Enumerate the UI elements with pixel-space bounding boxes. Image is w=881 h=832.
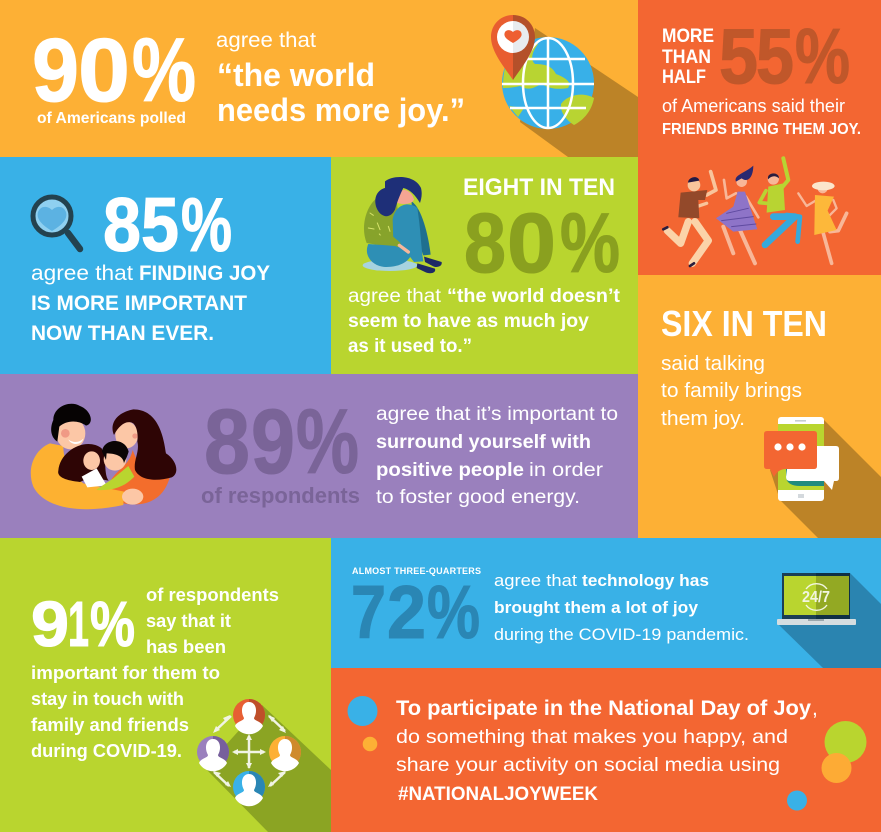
stat: 90%: %: [132, 21, 196, 121]
stat: 85%: %: [181, 183, 232, 268]
icon: sad woman sitting: [363, 177, 442, 273]
stat: 80%: 8: [464, 196, 506, 290]
arrows: connections: [213, 715, 286, 787]
panel: 72% technology: [331, 538, 881, 668]
text: surround yourself with positive people: positive people: [376, 460, 524, 481]
person: right: [269, 736, 301, 771]
panel: 55% friends bring joy: [638, 0, 881, 275]
text: how to participate: share your activity on social media using: [396, 754, 780, 776]
stat: 90%: [32, 21, 196, 121]
text: of Americans said their friends bring them joy: of Americans said their: [662, 96, 845, 116]
panel: call to action: [331, 668, 881, 832]
label: more than half: [662, 25, 714, 88]
text: important to stay in touch during COVID-19: [31, 585, 279, 761]
dancer one: [663, 172, 716, 266]
text: important to stay in touch during COVID-19: say that it: [146, 611, 231, 631]
icon: hugging family: [31, 404, 176, 509]
text: said talking to family brings them joy: to family brings: [661, 380, 802, 402]
dancer two: [716, 166, 758, 263]
text: agree that finding joy is more important now than ever: FINDING JOY: [139, 262, 270, 285]
text: how to participate: To participate in the National Day of Joy: [396, 697, 811, 720]
stat: 85%: 5: [141, 183, 179, 268]
stat: 90%: 0: [78, 21, 130, 121]
text: the world doesn't seem to have as much joy: as it used to.”: [348, 336, 472, 357]
text: surround yourself with positive people: surround yourself with: [376, 432, 591, 453]
text: technology has brought joy: technology has: [582, 571, 709, 590]
stat: 85%: [103, 183, 232, 268]
text: said talking to family brings them joy: said talking: [661, 353, 765, 375]
stat: 55%: [719, 12, 850, 100]
text: technology has brought joy: [494, 571, 749, 644]
person: left: [197, 736, 229, 771]
panel: 85% finding joy: [0, 157, 331, 374]
text: surround yourself with positive people: to foster good energy.: [376, 487, 580, 508]
panel: six in ten: [638, 275, 881, 538]
decorative dots: [348, 696, 866, 810]
text: important to stay in touch during COVID-19: has been: [146, 637, 226, 657]
icon: dancing friends: [663, 158, 847, 266]
text: agree that the world needs more joy: “the world: [217, 57, 375, 93]
label: eight in ten: EIGHT IN TEN: [463, 174, 615, 201]
label: more than half: HALF: [662, 66, 706, 88]
label: almost three-quarters: ALMOST THREE-QUARTERS: [352, 566, 481, 576]
text: how to participate: ,: [812, 697, 818, 720]
text: important to stay in touch during COVID-19: of respondents: [146, 585, 279, 605]
icon: laptop 24/7: [777, 573, 881, 668]
stat: 90%: 9: [32, 21, 79, 121]
text: the world doesn't seem to have as much joy: agree that: [348, 286, 442, 307]
text: the world doesn't seem to have as much joy: “the world doesn’t: [447, 286, 621, 307]
text: how to participate: [396, 697, 818, 776]
icon: phone with chat bubbles: [764, 417, 881, 538]
text: important to stay in touch during COVID-19: stay in touch with: [31, 689, 184, 709]
text: technology has brought joy: agree that: [494, 571, 577, 590]
dancer four: [798, 182, 847, 263]
text: surround yourself with positive people: agree that it’s important to: [376, 404, 618, 425]
text: important to stay in touch during COVID-19: important for them to: [31, 663, 220, 683]
stat: 72%: 7: [351, 570, 386, 654]
stat: 80%: 0: [507, 196, 556, 290]
text: technology has brought joy: during the COVID-19 pandemic.: [494, 625, 749, 644]
text: of Americans said their friends bring them joy: FRIENDS BRING THEM JOY.: [662, 121, 861, 138]
stat: 80%: [464, 196, 620, 290]
label: more than half: MORE: [662, 25, 714, 47]
label: more than half: THAN: [662, 46, 711, 68]
icon: globe with heart pin: [491, 15, 638, 157]
stat: 89%: [204, 391, 359, 493]
stat: 91%: 1: [68, 588, 89, 660]
text: said talking to family brings them joy: [661, 353, 802, 430]
stat: 85%: 8: [103, 183, 141, 268]
text: the world doesn't seem to have as much joy: [348, 286, 621, 357]
stat: 72%: [351, 570, 480, 654]
panel: 89% positive people: [0, 374, 638, 538]
text: agree that the world needs more joy: needs more joy.”: [217, 92, 465, 128]
text: of Americans said their friends bring them joy: [662, 96, 861, 138]
text: agree that the world needs more joy: agree that: [216, 29, 316, 52]
caption: of Americans polled: of Americans polled: [37, 110, 186, 127]
text: agree that finding joy is more important now than ever: [31, 262, 270, 345]
icon: connected people network: [197, 699, 331, 832]
stat: 55%: %: [795, 12, 850, 100]
text: technology has brought joy: brought them a lot of joy: [494, 598, 699, 617]
person: top: [233, 699, 265, 734]
stat: 91%: [31, 588, 135, 660]
stat: 91%: 9: [31, 588, 69, 660]
heading: six in ten: SIX IN TEN: [661, 303, 827, 344]
stat: 72%: %: [427, 570, 480, 654]
text: surround yourself with positive people: [376, 404, 618, 508]
icon: laptop 24/7: 24/7: [802, 589, 830, 606]
stat: 91%: %: [90, 588, 135, 660]
person: bottom: [233, 771, 265, 806]
stat: 80%: %: [560, 196, 620, 290]
text: surround yourself with positive people: in order: [529, 460, 604, 481]
stat: 72%: 2: [387, 570, 426, 654]
panel: 90% the world needs more joy: [0, 0, 638, 157]
panel: 80% eight in ten: [331, 157, 638, 374]
icon: magnifying glass with heart: [33, 197, 80, 249]
stat: 89%: 8: [204, 391, 250, 493]
text: agree that finding joy is more important now than ever: IS MORE IMPORTANT: [31, 292, 247, 315]
stat: 89%: %: [296, 391, 359, 493]
text: said talking to family brings them joy: them joy.: [661, 408, 745, 430]
stat: 55%: 5: [756, 12, 794, 100]
text: agree that the world needs more joy: [216, 29, 465, 128]
dancer three: [759, 158, 800, 245]
stat: 89%: 9: [251, 391, 295, 493]
text: important to stay in touch during COVID-19: during COVID-19.: [31, 741, 182, 761]
text: agree that finding joy is more important now than ever: agree that: [31, 262, 133, 285]
text: agree that finding joy is more important now than ever: NOW THAN EVER.: [31, 322, 214, 345]
panel: 91% stay in touch: [0, 538, 331, 832]
text: the world doesn't seem to have as much joy: seem to have as much joy: [348, 311, 589, 332]
text: important to stay in touch during COVID-19: family and friends: [31, 715, 189, 735]
text: how to participate: do something that makes you happy, and: [396, 726, 788, 748]
stat: 55%: 5: [719, 12, 758, 100]
caption: of respondents: of respondents: [201, 483, 360, 508]
hashtag: #NATIONALJOYWEEK: [398, 784, 598, 805]
